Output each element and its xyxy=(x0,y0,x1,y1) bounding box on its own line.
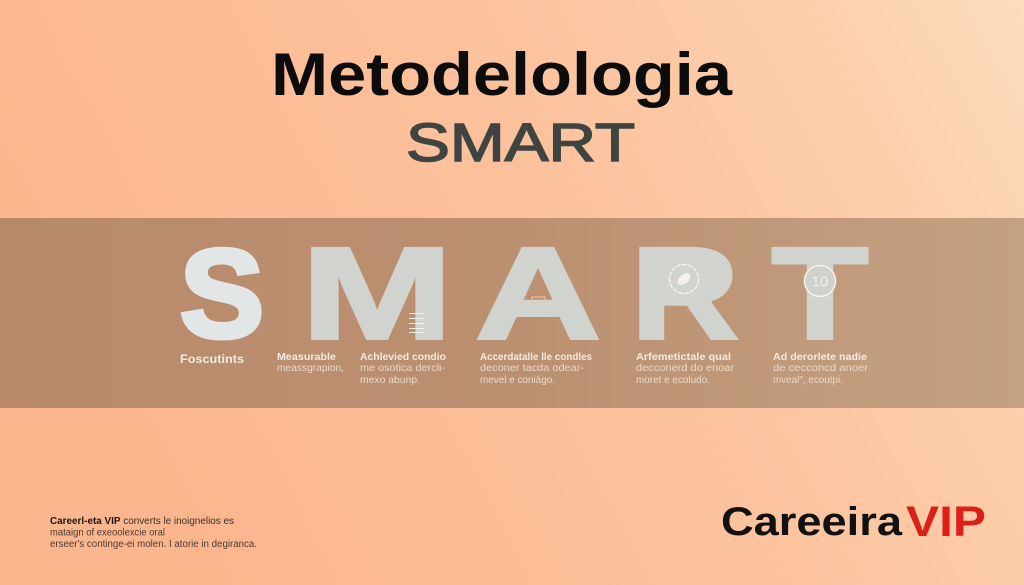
footer text block: mataign of exeoolexcie oral xyxy=(50,528,165,538)
caption: R: moret e ecoludo. xyxy=(636,374,710,386)
letter T: T xyxy=(772,220,868,366)
footer text block: Careerl-eta VIP converts le inoignelios es xyxy=(50,516,234,527)
caption: A2: deconer tacda odear- xyxy=(480,362,585,374)
caption: A1: me osotica dercli- xyxy=(360,362,446,374)
caption: R: Arfemetictale qual xyxy=(636,351,731,363)
footer text block: erseer's continge-ei molen. I atorie in degiranca. xyxy=(50,539,257,550)
caption: M: meassgrapion, xyxy=(277,362,344,374)
caption: R: decconerd do enoar xyxy=(636,362,735,374)
caption: M xyxy=(277,351,344,374)
logo: Careeira VIP: VIP xyxy=(906,498,986,546)
icon: stacked lines xyxy=(409,314,424,332)
caption: T: de cecconcd anoer xyxy=(773,362,869,374)
caption: A1: Achlevied condio xyxy=(360,351,446,363)
R counter fill xyxy=(662,258,712,302)
panel: SMART band xyxy=(0,218,1024,408)
caption: T: mveal", ecoutpi. xyxy=(773,374,843,386)
caption: A2 xyxy=(480,351,592,386)
caption: S: Foscutints xyxy=(180,354,244,366)
caption: A1 xyxy=(360,351,446,386)
subtitle: SMART xyxy=(406,113,635,173)
logo: Careeira VIP: Careeira xyxy=(721,500,903,544)
footer text block xyxy=(50,516,257,550)
caption: R xyxy=(636,351,735,386)
caption: A1: mexo abunp. xyxy=(360,374,420,386)
caption: T xyxy=(773,351,869,386)
letter A: A xyxy=(475,220,601,366)
icon: small frame xyxy=(532,297,545,303)
caption: A2: mevel e coniágo. xyxy=(480,374,555,386)
title: Metodelologia xyxy=(271,41,733,108)
icon: number badge xyxy=(804,266,836,296)
caption: M: Measurable xyxy=(277,351,336,363)
icon: badge with leaf xyxy=(670,264,698,294)
letter S: S xyxy=(180,225,264,364)
caption: T: Ad derorlete nadie xyxy=(773,351,867,363)
icon: number badge: 10 xyxy=(812,274,828,290)
letter R: R xyxy=(631,220,739,366)
logo: Careeira VIP xyxy=(721,498,986,546)
letter M: M xyxy=(301,220,453,366)
caption: A2: Accerdatalle lle condles xyxy=(480,351,592,363)
